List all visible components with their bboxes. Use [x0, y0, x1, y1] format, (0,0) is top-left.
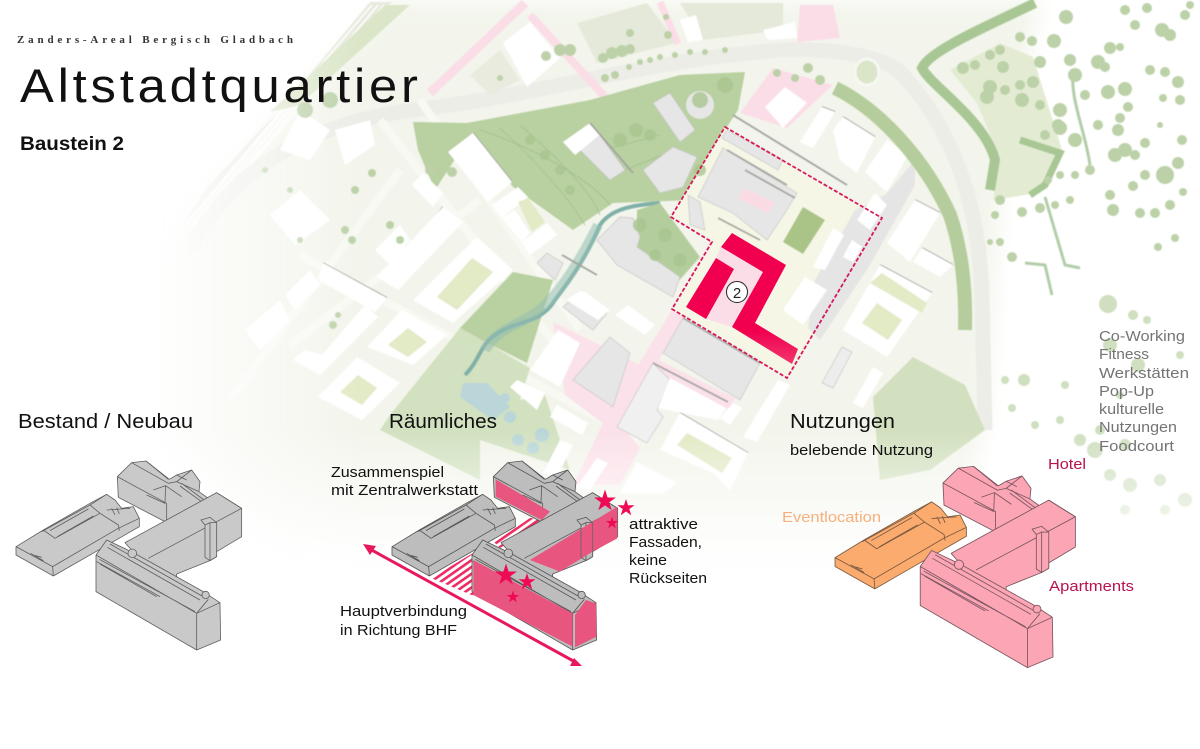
callout: attraktive Fassaden [629, 517, 707, 587]
green channel [922, 3, 1035, 190]
east meadow [950, 43, 1063, 200]
map base tone [120, 0, 1040, 560]
brook [1025, 70, 1090, 295]
callout: Zusammenspiel: mit Zentralwerkstatt [331, 483, 478, 499]
callout: Hauptverbindung: in Richtung BHF [340, 623, 457, 639]
usage list: Nutzungen [1099, 419, 1177, 436]
green courtyards [340, 198, 927, 473]
stream [465, 203, 660, 375]
west district streets [230, 100, 640, 440]
stream wide band [485, 225, 598, 350]
courtyard [706, 247, 763, 327]
left fade [150, 0, 360, 749]
building block 2 highlighted [686, 233, 798, 364]
label: Eventlocation: Eventlocation [782, 509, 881, 526]
white wing north cluster [563, 123, 600, 155]
usage list [1099, 328, 1189, 455]
creek green corridor [460, 272, 553, 363]
park tree clusters [525, 77, 733, 267]
building grey [392, 461, 618, 650]
title: Altstadtquartier [20, 61, 418, 113]
callout: attraktive Fassaden: keine [629, 553, 667, 569]
lawn in dashed block [783, 207, 825, 254]
east park [637, 203, 700, 283]
dark shadow edges [323, 107, 953, 453]
isometric: Nutzungen [835, 466, 1075, 668]
grey octagon [686, 91, 714, 119]
white buildings east [577, 87, 953, 493]
usage list: Co-Working [1099, 328, 1185, 345]
north park [413, 72, 745, 230]
grey buildings [537, 93, 852, 443]
callout: Hauptverbindung [340, 604, 467, 639]
east tree belt [835, 88, 965, 330]
faint lower-right trees [1001, 295, 1192, 515]
east pink plaza [740, 68, 833, 128]
usage list: Pop-Up [1099, 383, 1154, 400]
callout: Zusammenspiel [331, 465, 478, 499]
callout: attraktive Fassaden: Rückseiten [629, 571, 707, 587]
number badge: 2 [733, 285, 741, 302]
park paths [480, 125, 680, 225]
white buildings west [245, 110, 655, 477]
hatched connection [431, 518, 548, 596]
orange event block [835, 502, 966, 589]
pond and basins [460, 383, 549, 454]
subtitle: Zanders-Areal Bergisch Gladbach [17, 34, 293, 46]
pink paths [430, 2, 678, 185]
usage list: Werkstätten [1099, 365, 1189, 382]
south-east woodland [873, 357, 985, 480]
red C-shaped building [721, 233, 798, 364]
east grey strip [808, 160, 915, 340]
heading: Nutzungen: Nutzungen [790, 410, 895, 433]
left white [0, 0, 150, 749]
site boundary dashed [671, 127, 882, 378]
pink top square [797, 5, 840, 42]
heading: Bestand / Neubau: Bestand / Neubau [18, 410, 193, 433]
callout: Hauptverbindung: Hauptverbindung [340, 604, 467, 620]
isometric: Bestand [16, 461, 242, 650]
south green [380, 328, 570, 480]
upper district zones [470, 3, 797, 95]
stars [495, 490, 635, 602]
bottom fade [0, 430, 1200, 580]
isometric: Räumliches [363, 461, 635, 666]
red facades [473, 479, 617, 647]
lower white [0, 580, 1200, 749]
railway tracks [180, 2, 410, 230]
meadow edge [1020, 140, 1060, 195]
section label: Baustein 2 [20, 134, 124, 155]
double arrow [363, 544, 582, 666]
roundabout [855, 59, 879, 85]
callout: attraktive Fassaden: Fassaden, [629, 535, 702, 551]
label: Hotel: Hotel [1048, 456, 1086, 473]
label: Apartments: Apartments [1049, 578, 1134, 595]
south-central pink streets [553, 218, 738, 485]
usage list: Fitness [1099, 346, 1149, 363]
dashed block ground [671, 127, 882, 378]
red bar building [686, 258, 734, 319]
pink roof [738, 188, 775, 213]
main road [190, 50, 985, 430]
heading: Räumliches: Räumliches [389, 410, 497, 433]
callout: Zusammenspiel: Zusammenspiel [331, 465, 444, 481]
pink hotel and apartments [920, 466, 1075, 668]
sub heading: belebende Nutzung: belebende Nutzung [790, 442, 933, 459]
trees [262, 1, 1194, 329]
usage list: kulturelle [1099, 401, 1164, 418]
callout: attraktive Fassaden: attraktive [629, 517, 698, 533]
usage list: Foodcourt [1099, 438, 1175, 455]
